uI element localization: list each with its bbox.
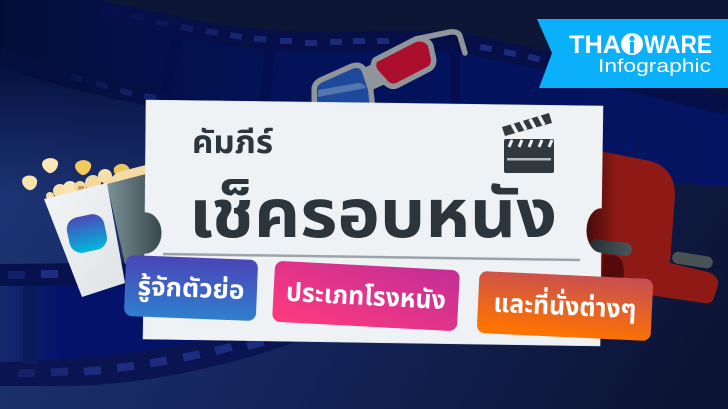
- badge: ประเภทโรงหนัง: ประเภทโรงหนัง: [285, 277, 447, 315]
- badge: และที่นั่งต่างๆ: และที่นั่งต่างๆ: [493, 285, 637, 324]
- logo ribbon: Thaiware Infographic: [537, 19, 728, 88]
- badge: รู้จักตัวย่อ: [124, 255, 258, 321]
- icon: 3D glasses: [317, 32, 465, 108]
- badge: และที่นั่งต่างๆ: [477, 271, 653, 341]
- icon: red cinema seat: [580, 147, 718, 303]
- top dark band: [100, 0, 728, 95]
- film strip: upper: [0, 0, 728, 186]
- icon: clapperboard: [502, 113, 554, 173]
- badge: รู้จักตัวย่อ: รู้จักตัวย่อ: [137, 271, 245, 306]
- badge: ประเภทโรงหนัง: [272, 261, 460, 331]
- film strip: lower: [0, 262, 300, 386]
- logo on popcorn box: [65, 212, 109, 255]
- popcorn kernels: [22, 158, 146, 200]
- heading main: เช็ครอบหนัง: [189, 176, 557, 252]
- ticket panel: [143, 100, 603, 346]
- icon: popcorn box: [22, 158, 170, 297]
- divider line: [163, 254, 580, 260]
- logo ribbon: Thaiware Infographic: WARE: [644, 31, 712, 59]
- logo ribbon: Thaiware Infographic: Infographic: [598, 56, 711, 76]
- heading small: คัมภีร์: [192, 124, 273, 160]
- logo ribbon: Thaiware Infographic: THA: [569, 31, 621, 59]
